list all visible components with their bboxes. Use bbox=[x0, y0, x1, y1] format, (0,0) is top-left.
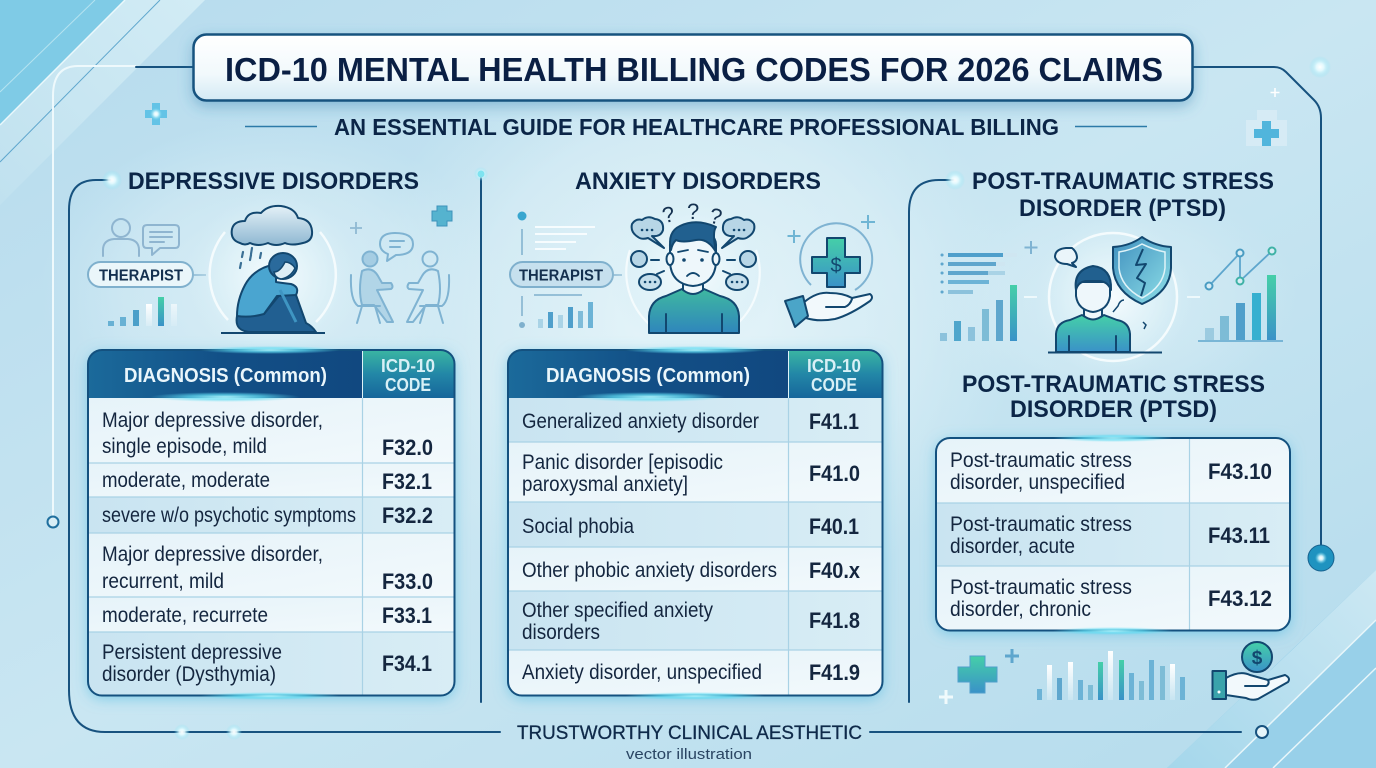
table: depressive disorders: F32.2 bbox=[382, 503, 433, 528]
icon: therapist with speech bubble bbox=[103, 219, 179, 256]
table: anxiety disorders: ICD-10 bbox=[807, 356, 861, 376]
table: anxiety disorders: Social phobia bbox=[522, 515, 634, 538]
table: anxiety disorders: Other phobic anxiety disorders bbox=[522, 559, 777, 582]
table: depressive disorders: severe w/o psychotic symptoms bbox=[102, 504, 356, 527]
table: anxiety disorders: paroxysmal anxiety] bbox=[522, 473, 688, 496]
heading: PTSD repeated: DISORDER (PTSD) bbox=[1010, 396, 1217, 423]
table: anxiety disorders: F40.1 bbox=[809, 514, 859, 539]
table: depressive disorders: F32.1 bbox=[382, 469, 432, 494]
table: anxiety disorders: Other specified anxiety bbox=[522, 599, 713, 622]
table: depressive disorders: single episode, mild bbox=[102, 435, 267, 458]
table: PTSD bbox=[936, 434, 1290, 635]
illustration: anxious person with thought bubbles: ? bbox=[707, 203, 724, 230]
table: anxiety disorders: F40.x bbox=[809, 558, 861, 583]
icon: hand holding dollar coin: $ bbox=[1252, 648, 1263, 669]
footer caption bbox=[517, 722, 862, 763]
table: PTSD: Post-traumatic stress bbox=[950, 449, 1132, 472]
table: depressive disorders: Persistent depressive bbox=[102, 641, 282, 664]
label: therapist pill: THERAPIST bbox=[519, 268, 603, 284]
panel: depressive disorders bbox=[88, 168, 455, 700]
table: depressive disorders: DIAGNOSIS (Common) bbox=[124, 365, 327, 387]
table: depressive disorders: F33.1 bbox=[382, 603, 432, 628]
label: therapist pill: THERAPIST bbox=[99, 268, 183, 284]
table: PTSD: Post-traumatic stress bbox=[950, 576, 1132, 599]
heading: PTSD repeated: POST-TRAUMATIC STRESS bbox=[962, 371, 1265, 398]
bar chart: small bbox=[519, 295, 593, 328]
table: anxiety disorders: Generalized anxiety disorder bbox=[522, 410, 759, 433]
subtitle: AN ESSENTIAL GUIDE FOR HEALTHCARE PROFESSIONAL BILLING bbox=[334, 114, 1059, 140]
table: anxiety disorders bbox=[508, 346, 883, 700]
table: depressive disorders: F34.1 bbox=[382, 651, 432, 676]
table: depressive disorders: F33.0 bbox=[382, 569, 433, 594]
icon: medical cross with dollar in caring hand: $ bbox=[830, 255, 842, 277]
table: depressive disorders: CODE bbox=[385, 375, 431, 395]
table: PTSD: F43.11 bbox=[1208, 523, 1270, 548]
icon: glowing cross top left bbox=[145, 103, 167, 125]
table: anxiety disorders: F41.9 bbox=[809, 660, 860, 685]
title banner: ICD-10 MENTAL HEALTH BILLING CODES FOR 2026 CLAIMS bbox=[225, 52, 1163, 89]
heading: PTSD: POST-TRAUMATIC STRESS bbox=[972, 168, 1274, 195]
bar chart: bottom bbox=[1037, 651, 1185, 700]
illustration: anxious person with thought bubbles bbox=[608, 185, 778, 355]
table: depressive disorders: recurrent, mild bbox=[102, 570, 224, 593]
icon: notes timeline bbox=[518, 212, 595, 255]
table: depressive disorders: moderate, recurrete bbox=[102, 604, 268, 627]
footer caption: vector illustration bbox=[626, 747, 752, 763]
title banner bbox=[194, 34, 1192, 100]
bar chart: small bbox=[108, 297, 177, 326]
illustration: person with cracked shield bbox=[1033, 217, 1193, 377]
table: anxiety disorders: CODE bbox=[811, 375, 857, 395]
icon: medical cross with pluses bbox=[939, 649, 1019, 704]
chart: list lines and bars left bbox=[940, 241, 1200, 341]
footer caption: TRUSTWORTHY CLINICAL AESTHETIC bbox=[517, 722, 862, 744]
table: anxiety disorders: disorders bbox=[522, 621, 600, 644]
table: depressive disorders bbox=[88, 346, 455, 700]
heading: PTSD: DISORDER (PTSD) bbox=[1019, 195, 1226, 222]
illustration: therapy session bbox=[350, 206, 452, 323]
table: PTSD: disorder, acute bbox=[950, 535, 1075, 558]
illustration: person under rain cloud bbox=[188, 192, 358, 362]
table: anxiety disorders: F41.1 bbox=[809, 409, 859, 434]
heading: depressive disorders: DEPRESSIVE DISORDERS bbox=[128, 168, 419, 195]
table: PTSD: disorder, chronic bbox=[950, 598, 1091, 621]
table: depressive disorders: ICD-10 bbox=[381, 356, 435, 376]
icon: medical cross top right bbox=[1246, 88, 1287, 146]
table: PTSD: disorder, unspecified bbox=[950, 471, 1125, 494]
icon: medical cross with dollar in caring hand bbox=[785, 215, 875, 327]
table: depressive disorders: Major depressive disorder, bbox=[102, 543, 323, 566]
panel: post-traumatic stress disorder bbox=[936, 168, 1290, 704]
label: therapist pill bbox=[88, 262, 206, 287]
table: anxiety disorders: Anxiety disorder, unspecified bbox=[522, 661, 762, 684]
illustration: anxious person with thought bubbles: ? bbox=[660, 201, 677, 228]
chart: line and bars right bbox=[1198, 248, 1283, 341]
table: PTSD: Post-traumatic stress bbox=[950, 513, 1132, 536]
illustration: anxious person with thought bubbles: ? bbox=[687, 199, 699, 224]
table: depressive disorders: F32.0 bbox=[382, 435, 433, 460]
label: therapist pill bbox=[510, 262, 622, 287]
icon: hand holding dollar coin bbox=[1212, 642, 1289, 700]
table: anxiety disorders: Panic disorder [episodic bbox=[522, 451, 723, 474]
heading: anxiety disorders: ANXIETY DISORDERS bbox=[575, 168, 821, 195]
table: anxiety disorders: F41.0 bbox=[809, 461, 860, 486]
table: PTSD: F43.10 bbox=[1208, 459, 1272, 484]
table: anxiety disorders: DIAGNOSIS (Common) bbox=[546, 365, 750, 387]
heading: PTSD repeated bbox=[962, 371, 1265, 423]
heading: PTSD bbox=[972, 168, 1274, 222]
table: depressive disorders: moderate, moderate bbox=[102, 469, 270, 492]
table: depressive disorders: disorder (Dysthymia) bbox=[102, 663, 276, 686]
table: anxiety disorders: F41.8 bbox=[809, 608, 860, 633]
table: PTSD: F43.12 bbox=[1208, 586, 1272, 611]
panel: anxiety disorders bbox=[508, 168, 883, 700]
table: depressive disorders: Major depressive disorder, bbox=[102, 409, 323, 432]
